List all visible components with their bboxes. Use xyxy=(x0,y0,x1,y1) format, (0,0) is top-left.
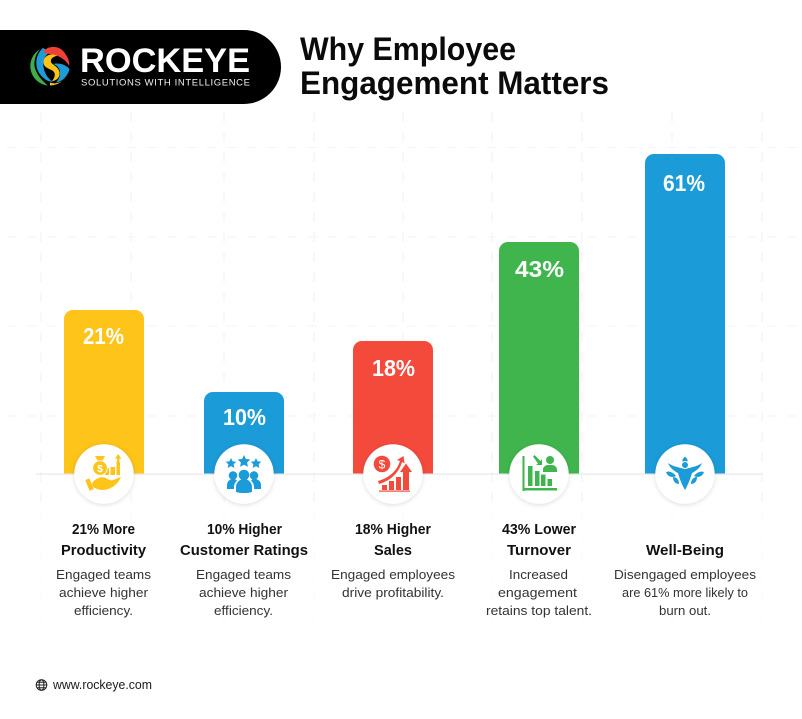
icon: customer ratings stars and people xyxy=(214,444,274,504)
logo wordmark: ROCKEYE xyxy=(80,42,250,80)
label: sales: drive profitability. xyxy=(342,585,444,600)
label: well-being: burn out. xyxy=(659,603,711,618)
bar: 43% xyxy=(499,242,579,474)
bar: 10% xyxy=(204,392,284,474)
footer website xyxy=(36,678,152,692)
icon: productivity hand and money bag xyxy=(74,444,134,504)
label: sales xyxy=(331,522,456,600)
icon: well-being figure xyxy=(655,444,715,504)
label: productivity: efficiency. xyxy=(74,603,133,618)
label: turnover: engagement xyxy=(498,585,577,600)
bar: 43%: 43% xyxy=(515,256,564,282)
label: well-being xyxy=(614,543,757,618)
label: customer ratings: efficiency. xyxy=(214,603,273,618)
title: Engagement Matters xyxy=(300,65,609,101)
title: Why Employee xyxy=(300,31,516,67)
label: turnover xyxy=(486,522,592,618)
title xyxy=(300,31,609,101)
label: turnover: Increased xyxy=(509,567,568,582)
icon: rockeye swirl logo xyxy=(30,47,70,86)
label: productivity: achieve higher xyxy=(59,585,149,600)
label: customer ratings: Engaged teams xyxy=(196,567,292,582)
bar: 61%: 61% xyxy=(663,170,705,196)
icon: sales growth chart: $ xyxy=(379,458,386,472)
label: customer ratings xyxy=(180,522,308,618)
bar: 18%: 18% xyxy=(372,355,415,381)
icon: turnover chart and person xyxy=(509,444,569,504)
bar: 61% xyxy=(645,154,725,474)
label: sales: Sales xyxy=(374,543,412,559)
icon: sales growth chart xyxy=(363,444,423,504)
label: productivity xyxy=(56,522,152,618)
bar: 21% xyxy=(64,310,144,474)
website url: www.rockeye.com xyxy=(52,678,152,692)
icon: globe xyxy=(36,680,47,690)
label: well-being: Well-Being xyxy=(646,543,724,559)
label: customer ratings: 10% Higher xyxy=(207,522,282,538)
label: productivity: Productivity xyxy=(61,543,146,559)
label: turnover: retains top talent. xyxy=(486,603,592,618)
bar: 18% xyxy=(353,341,433,474)
bar: 10%: 10% xyxy=(223,404,266,430)
label: customer ratings: achieve higher xyxy=(199,585,289,600)
icon: productivity hand and money bag: $ xyxy=(97,463,103,475)
label: well-being: are 61% more likely to xyxy=(622,585,748,600)
label: turnover: Turnover xyxy=(507,543,571,559)
label: sales: Engaged employees xyxy=(331,567,456,582)
header logo banner xyxy=(0,30,281,104)
label: sales: 18% Higher xyxy=(355,522,431,538)
label: turnover: 43% Lower xyxy=(502,522,576,538)
bar chart xyxy=(64,154,725,474)
label: productivity: 21% More xyxy=(72,522,135,538)
bar: 21%: 21% xyxy=(83,323,124,349)
logo tagline: SOLUTIONS WITH INTELLIGENCE xyxy=(81,78,250,88)
label: customer ratings: Customer Ratings xyxy=(180,543,308,559)
label: productivity: Engaged teams xyxy=(56,567,152,582)
label: well-being: Disengaged employees xyxy=(614,567,757,582)
